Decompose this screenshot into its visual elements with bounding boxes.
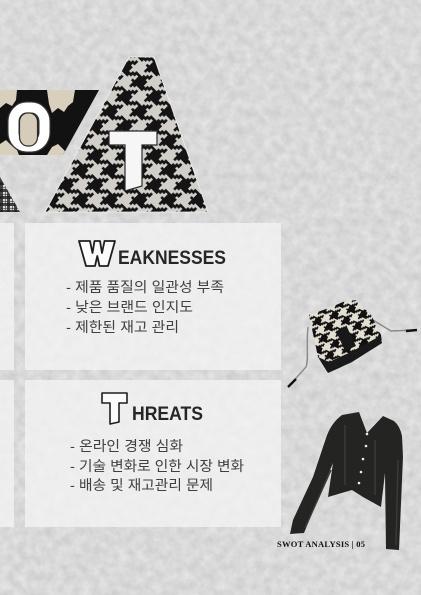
letter T — [109, 131, 157, 191]
letter O — [14, 108, 44, 146]
heading: threats — [102, 393, 203, 425]
list: weaknesses: - 낮은 브랜드 인지도 — [66, 300, 193, 316]
letter tile: houndstooth trapezoid T — [45, 57, 208, 212]
cardigan buttons — [358, 433, 368, 484]
list: weaknesses: - 제한된 재고 관리 — [66, 320, 179, 336]
image: black cardigan — [290, 412, 403, 550]
bag body — [309, 300, 382, 373]
list: weaknesses — [66, 280, 224, 336]
heading: weaknesses: EAKNESSES — [118, 247, 226, 269]
list: weaknesses: - 제품 품질의 일관성 부족 — [66, 280, 224, 296]
list: threats — [70, 439, 244, 494]
panel: threats — [25, 380, 281, 527]
heading: threats: HREATS — [132, 403, 203, 425]
plaid triangle fragment — [0, 177, 20, 212]
bag strap — [289, 320, 417, 386]
letter tile: O on woven band — [0, 90, 99, 155]
list: threats: - 온라인 경쟁 심화 — [70, 439, 183, 455]
panel: left top strip — [0, 223, 14, 370]
bag label — [336, 327, 356, 351]
list: threats: - 기술 변화로 인한 시장 변화 — [70, 459, 244, 475]
footer label: SWOT ANALYSIS | 05 — [277, 539, 365, 549]
panel: left bottom strip — [0, 380, 14, 527]
panel: weaknesses — [25, 223, 281, 370]
heading: weaknesses — [79, 241, 226, 269]
image: houndstooth bucket bag — [288, 300, 417, 387]
bag base — [318, 336, 382, 373]
list: threats: - 배송 및 재고관리 문제 — [70, 478, 213, 494]
